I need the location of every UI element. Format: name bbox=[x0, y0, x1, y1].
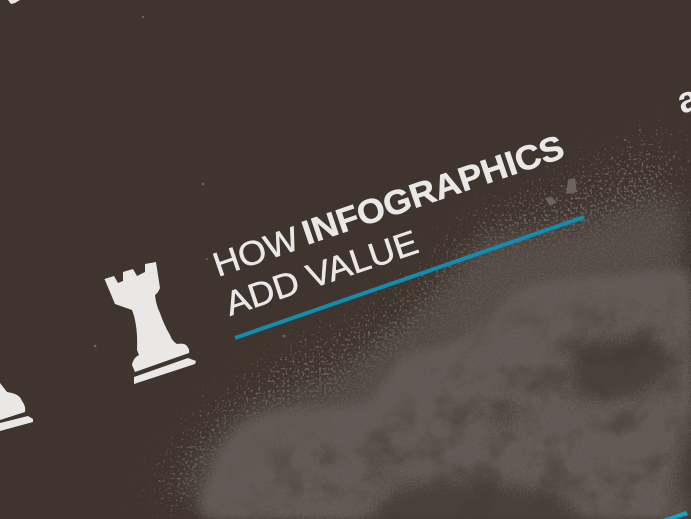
rock fragment, small bbox=[545, 197, 557, 205]
heading: INFOGRAPHICS bbox=[297, 128, 569, 253]
blue underline bbox=[235, 217, 584, 338]
heading bbox=[208, 128, 569, 324]
heading: ADD VALUE bbox=[220, 223, 423, 324]
cropped rook icon, left edge bbox=[0, 383, 33, 431]
cropped blue line, bottom right bbox=[663, 511, 688, 519]
rock fragment, tall bbox=[566, 178, 577, 194]
scattered speckles bbox=[94, 16, 671, 347]
rook icon bbox=[104, 262, 196, 384]
heading: HOW bbox=[208, 220, 304, 285]
cropped corner shape, top left bbox=[8, 0, 20, 4]
